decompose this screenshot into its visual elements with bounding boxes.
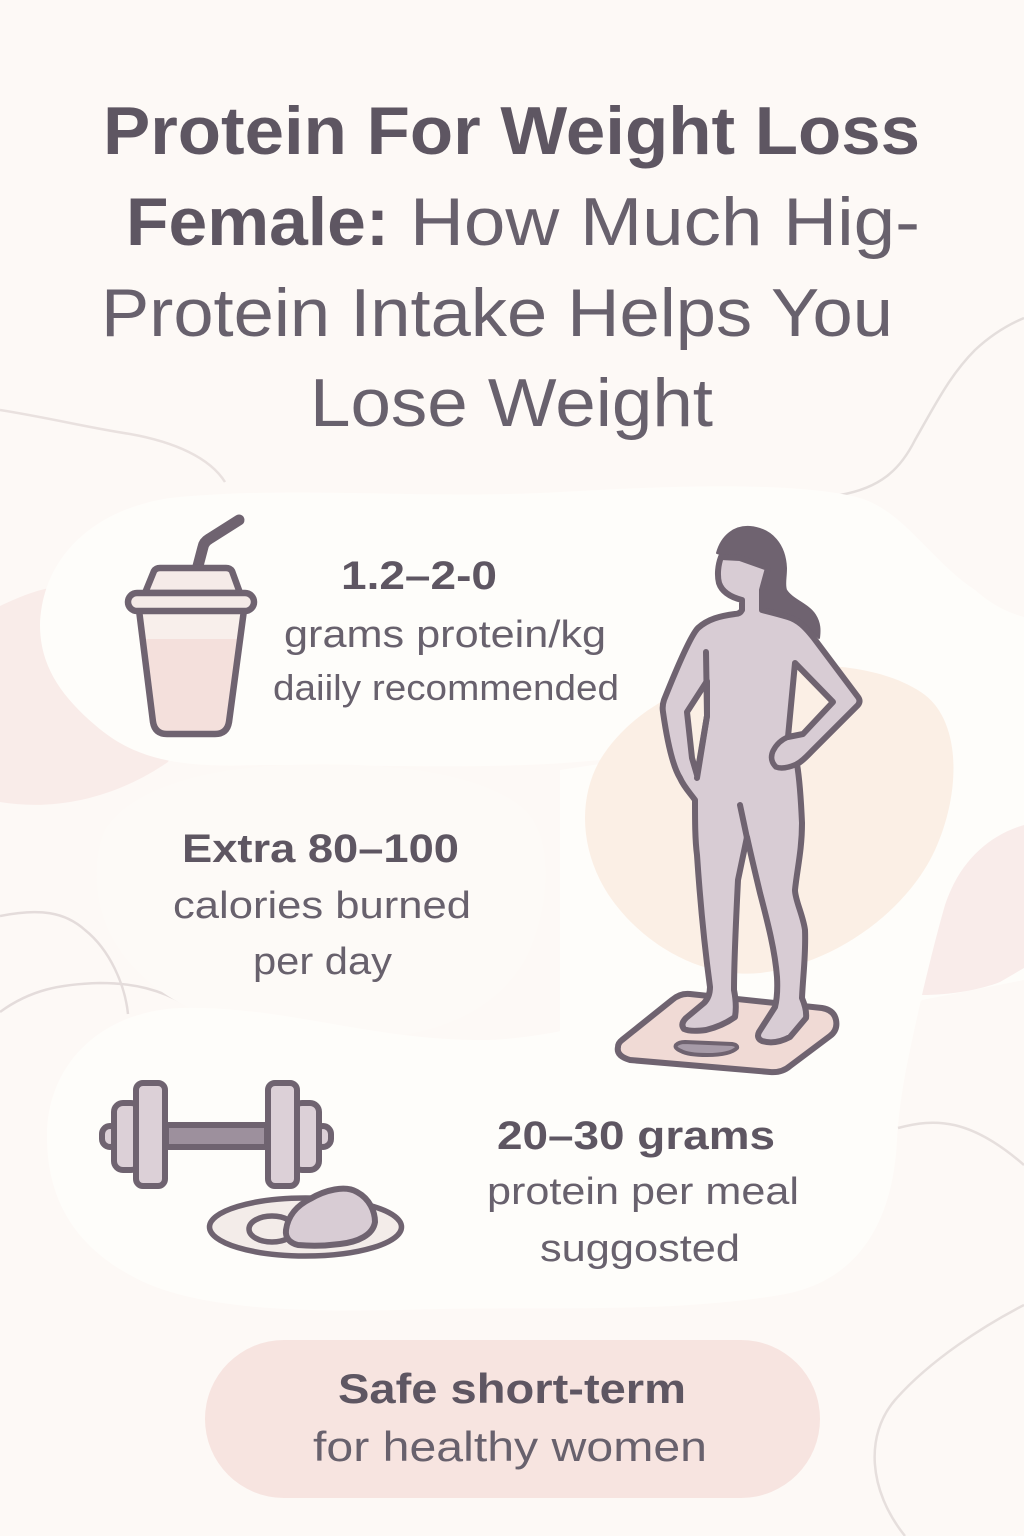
dumbbell bar [166, 1125, 267, 1147]
right knob [315, 1126, 331, 1147]
icon: protein shake cup [128, 520, 254, 734]
stat: extra calories burned: per day [253, 941, 392, 983]
bathroom scale [618, 994, 836, 1072]
background decorative shapes [0, 318, 1024, 1536]
peach blob behind figure [585, 665, 953, 974]
stat: protein per meal: 20–30 grams [497, 1114, 775, 1158]
callout: safe short-term pill: Safe short-term [338, 1365, 686, 1412]
right inner plate [293, 1103, 319, 1170]
icon: dumbbell and plate [102, 1083, 402, 1256]
left inner plate [114, 1103, 140, 1170]
cup rim [128, 593, 254, 611]
cup outline [139, 610, 244, 734]
stat: daily protein recommendation [273, 554, 619, 708]
hand outline [772, 737, 797, 768]
title: Female: [126, 184, 389, 260]
scale display [676, 1042, 737, 1055]
title: Protein Intake Helps You [101, 275, 893, 351]
panel: soft card for calories stat [97, 764, 546, 1040]
stat: daily protein recommendation: daiily recommended [273, 667, 619, 708]
cup lid [145, 568, 240, 593]
title: How Much Hig- [410, 184, 920, 260]
illustration: woman standing on scale [618, 527, 860, 1072]
pink blob at right edge [922, 825, 1024, 995]
chicken portion [286, 1189, 375, 1246]
stat: extra calories burned: calories burned [173, 885, 471, 927]
stat: protein per meal: suggosted [540, 1228, 740, 1270]
figure body [663, 557, 860, 1042]
dinner plate [210, 1198, 402, 1256]
figure hair [717, 527, 820, 638]
panel: soft white card for meal stat [47, 995, 922, 1311]
panel: soft white card for shake stat [40, 486, 1024, 780]
title: Lose Weight [310, 365, 713, 441]
cup liquid [143, 639, 240, 734]
panel: white area right of figure [560, 700, 1024, 1040]
cup straw [198, 520, 239, 566]
stat: daily protein recommendation: grams protein/kg [284, 614, 606, 656]
plate inner ring [249, 1216, 295, 1242]
stat: protein per meal: protein per meal [487, 1171, 799, 1213]
right plate [268, 1083, 297, 1186]
cup body [139, 610, 244, 734]
decorative line right of meal card [898, 1123, 1024, 1165]
stat: daily protein recommendation: 1.2–2-0 [341, 554, 497, 598]
left knob [102, 1126, 118, 1147]
torso and inner leg lines [697, 652, 747, 838]
callout: safe short-term pill: for healthy women [313, 1423, 707, 1470]
stat: extra calories burned: Extra 80–100 [182, 827, 459, 871]
left plate [136, 1083, 165, 1186]
title: Protein For Weight Loss [103, 93, 920, 169]
stat: extra calories burned [173, 827, 471, 983]
stat: protein per meal [487, 1114, 799, 1270]
title [101, 93, 920, 441]
callout: safe short-term pill [205, 1340, 820, 1498]
